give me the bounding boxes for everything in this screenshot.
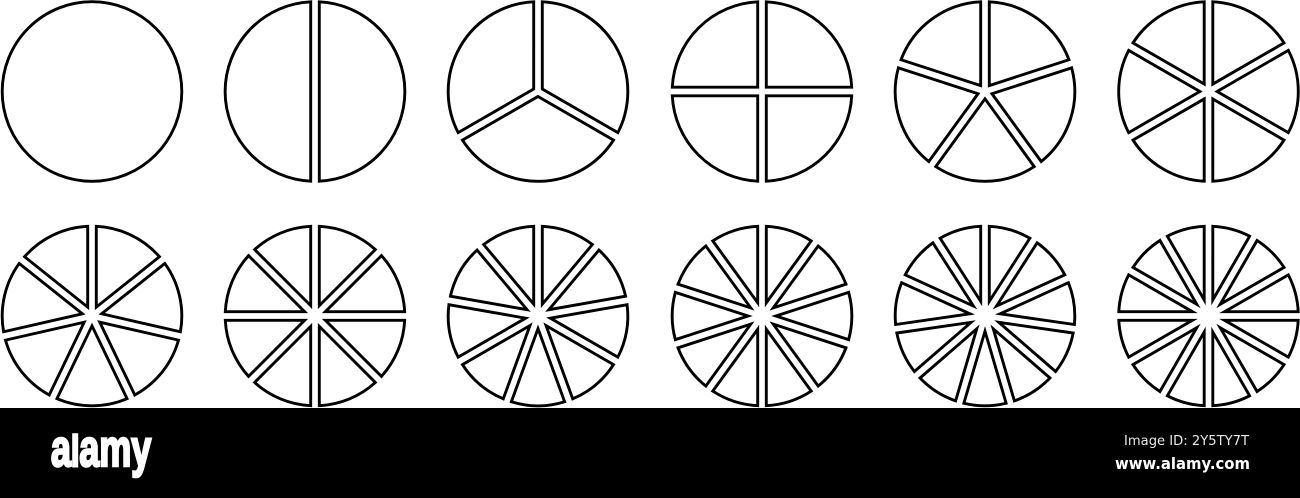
circle: 9 segments [445,223,631,406]
image id text: Image ID: 2Y5TY7T [1124,433,1250,449]
circle: 5 segments [884,0,1086,181]
circle: 6 segments [1119,0,1298,190]
circle: whole, 1 segment [2,2,182,181]
footer band [0,408,1300,498]
circle: 12 segments [1117,224,1300,408]
circle: 4 segments [656,0,868,198]
circle: 10 segments [672,223,852,409]
circle: 7 segments [0,220,187,406]
circle: 3 segments [422,0,654,181]
circle: 2 segments [225,2,405,181]
logo: alamy: alamy [51,421,151,478]
circle: 8 segments [220,221,410,411]
circle: 11 segments [893,224,1077,406]
website url: www.alamy.com [1115,454,1250,473]
